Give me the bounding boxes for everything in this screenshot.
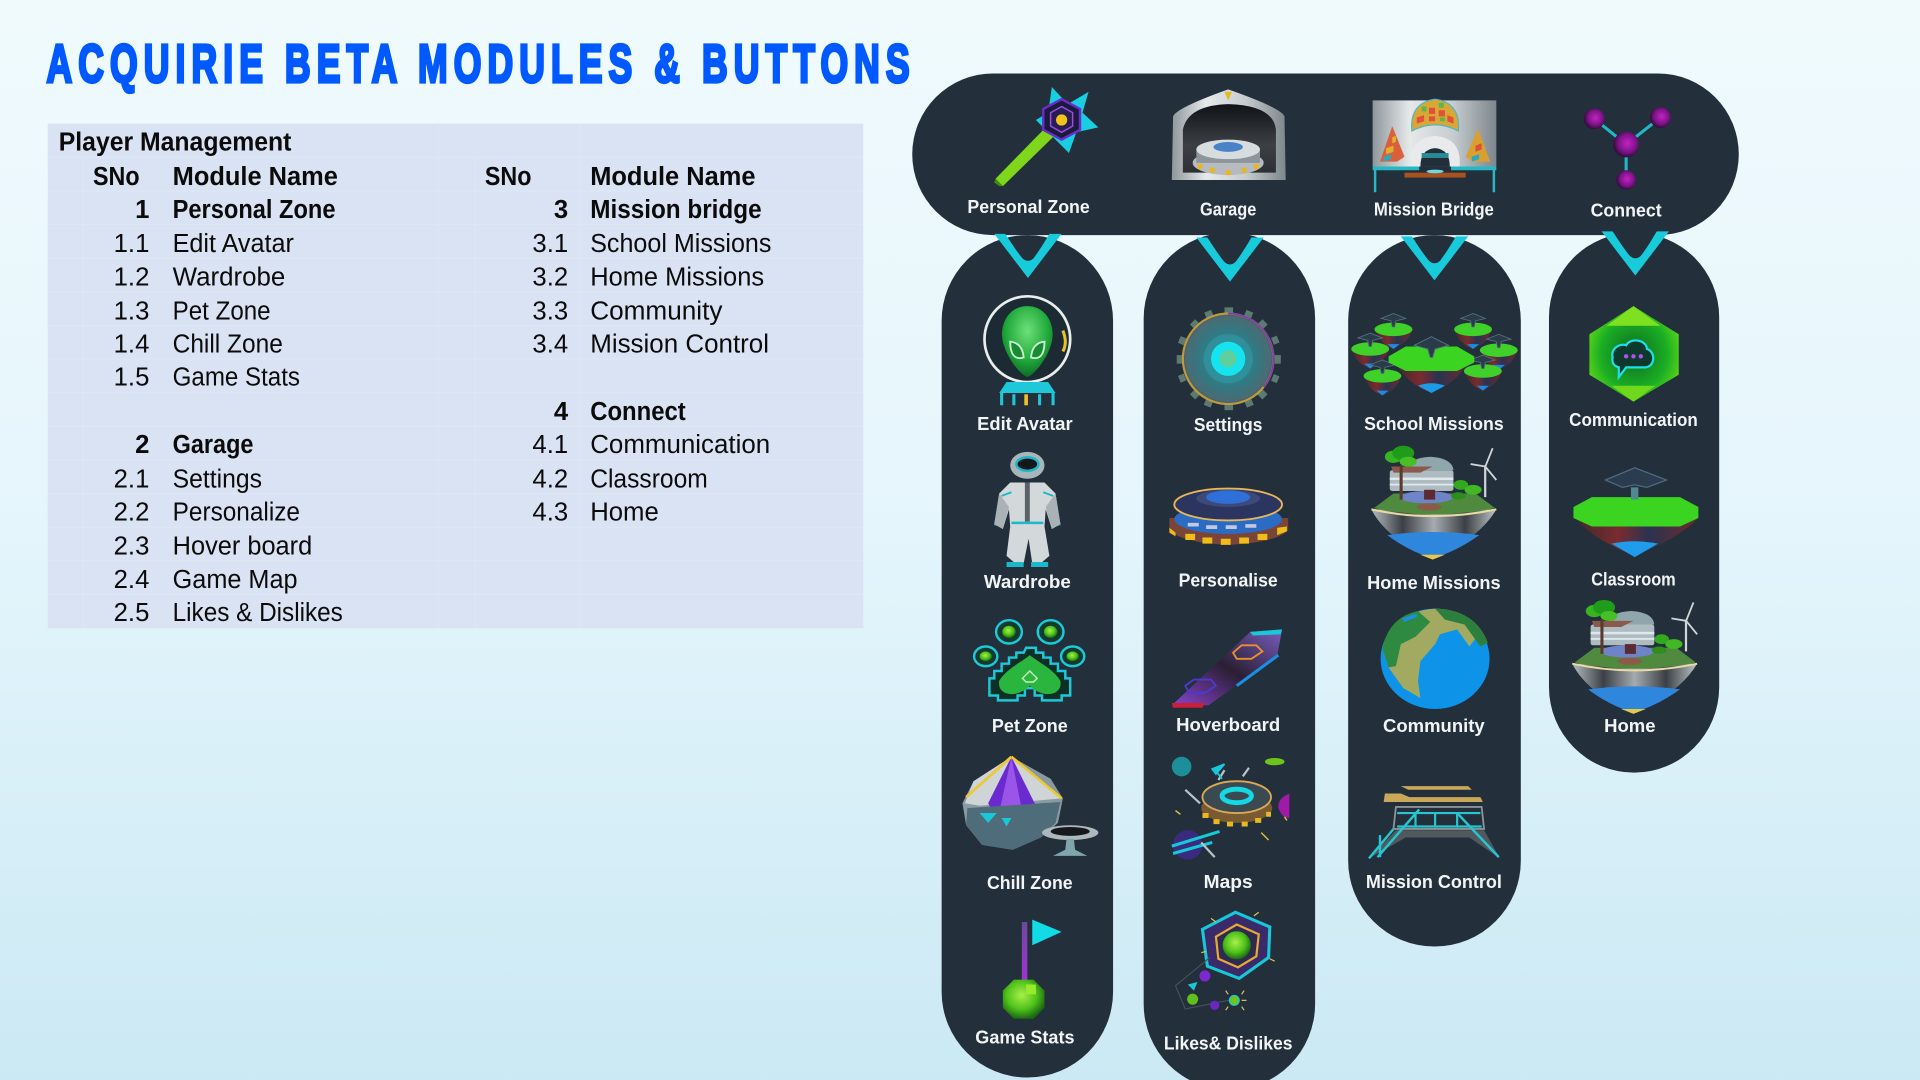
panel: garage column: [1144, 233, 1315, 1080]
right column rows: Home: [590, 498, 659, 526]
icon: pet zone paw: [974, 620, 1084, 700]
label: game stats: Game Stats: [975, 1026, 1074, 1047]
icon: school missions: [1351, 313, 1518, 396]
left column rows: 2.2: [114, 498, 149, 526]
label: connect: Connect: [1591, 200, 1662, 221]
left column rows: Likes & Dislikes: [173, 599, 343, 627]
left column rows: 2.3: [114, 533, 149, 561]
title: ACQUIRIE BETA MODULES & BUTTONS: [47, 34, 910, 94]
icon: home island: [1572, 600, 1697, 714]
right column rows: 4.1: [532, 431, 568, 459]
label: school missions: School Missions: [1364, 413, 1504, 434]
right column rows: 3.4: [532, 331, 568, 359]
label: chill zone: Chill Zone: [987, 872, 1073, 893]
left column rows: 1: [135, 196, 149, 224]
icon: maps: [1172, 757, 1289, 860]
left column rows: Hover board: [173, 533, 312, 561]
icon: communication gem: [1589, 306, 1679, 402]
label: personal zone: Personal Zone: [967, 196, 1090, 217]
right column rows: 3.1: [532, 230, 568, 258]
left column rows: Chill Zone: [173, 331, 283, 359]
left column rows: Garage: [173, 431, 253, 459]
right column rows: Mission Control: [590, 331, 769, 359]
left column rows: Personal Zone: [173, 196, 336, 224]
panel: mission bridge column: [1348, 235, 1521, 947]
left column rows: 1.2: [114, 263, 149, 291]
left column rows: Wardrobe: [173, 263, 285, 291]
label: wardrobe: Wardrobe: [984, 571, 1071, 592]
icon: home missions island: [1371, 446, 1496, 560]
panel: connect column: [1549, 231, 1719, 773]
icon: hoverboard: [1172, 629, 1282, 708]
right column rows: Home Missions: [590, 263, 764, 291]
right column rows: Module Name: [590, 163, 756, 191]
left column rows: 2.1: [114, 465, 149, 493]
right column rows: 3.3: [532, 298, 568, 326]
left column rows: Game Stats: [173, 364, 300, 392]
icon: chill zone: [962, 757, 1098, 856]
left column rows: 1.3: [114, 298, 149, 326]
left column rows: Personalize: [173, 498, 300, 526]
icon: edit avatar: [984, 296, 1070, 405]
right column rows: School Missions: [590, 230, 771, 258]
right column rows: 3: [554, 196, 568, 224]
label: classroom: Classroom: [1591, 568, 1676, 589]
left column rows: SNo: [93, 163, 140, 191]
label: mission bridge: Mission Bridge: [1374, 199, 1494, 220]
panel: top module bar: [912, 73, 1739, 235]
icon: personalise disc: [1169, 489, 1288, 545]
label: hoverboard: Hoverboard: [1176, 714, 1280, 735]
left column rows: 1.1: [114, 230, 149, 258]
icon: connect: [1584, 107, 1671, 190]
label: home missions: Home Missions: [1367, 572, 1501, 593]
label: communication: Communication: [1569, 409, 1698, 430]
right column rows: SNo: [485, 163, 531, 191]
label: home: Home: [1604, 715, 1656, 736]
left column rows: 2.5: [114, 599, 149, 627]
icon: mission control: [1369, 786, 1500, 858]
right column rows: Community: [590, 298, 723, 326]
icon: game stats flag: [1003, 920, 1062, 1019]
left column rows: Pet Zone: [173, 298, 271, 326]
right column rows: [485, 163, 771, 526]
left column rows: 1.4: [114, 331, 149, 359]
arrow: chevron: [1196, 238, 1264, 282]
table: player management modules: [48, 124, 863, 628]
left column rows: Module Name: [173, 163, 338, 191]
label: edit avatar: Edit Avatar: [977, 413, 1073, 434]
icon: classroom island: [1573, 468, 1698, 557]
label: community: Community: [1383, 715, 1485, 736]
label: personalise: Personalise: [1179, 570, 1278, 591]
left column rows: [93, 163, 343, 627]
label: likes and dislikes: Likes& Dislikes: [1164, 1032, 1292, 1053]
icon: garage: [1172, 89, 1286, 180]
label: maps: Maps: [1204, 871, 1253, 892]
right column rows: Mission bridge: [590, 196, 762, 224]
arrow: chevron: [1602, 231, 1669, 276]
icon: settings gear: [1177, 307, 1281, 410]
left column rows: 2: [135, 431, 149, 459]
icon: personal zone wand: [994, 87, 1098, 186]
arrow: chevron: [994, 234, 1062, 278]
label: garage: Garage: [1200, 199, 1256, 220]
right column rows: 4: [554, 398, 569, 426]
label: mission control: Mission Control: [1366, 871, 1502, 892]
icon: community globe: [1381, 609, 1490, 709]
left column rows: 2.4: [114, 566, 149, 594]
arrow: chevron: [1401, 236, 1468, 280]
right column rows: 4.3: [532, 498, 568, 526]
right column rows: Connect: [590, 398, 686, 426]
panel: personal zone column: [942, 234, 1113, 1078]
left column rows: Settings: [173, 465, 262, 493]
right column rows: 3.2: [532, 263, 568, 291]
label: pet zone: Pet Zone: [992, 715, 1068, 736]
icon: wardrobe: [994, 452, 1060, 567]
icon: mission bridge: [1373, 99, 1496, 192]
icon: likes and dislikes: [1176, 912, 1275, 1010]
right column rows: Classroom: [590, 465, 708, 493]
left column rows: Game Map: [173, 566, 298, 594]
label: settings: Settings: [1194, 414, 1262, 435]
right column rows: Communication: [590, 431, 770, 459]
table heading: Player Management: [59, 129, 292, 157]
right column rows: 4.2: [532, 465, 568, 493]
left column rows: Edit Avatar: [173, 230, 294, 258]
left column rows: 1.5: [114, 364, 149, 392]
